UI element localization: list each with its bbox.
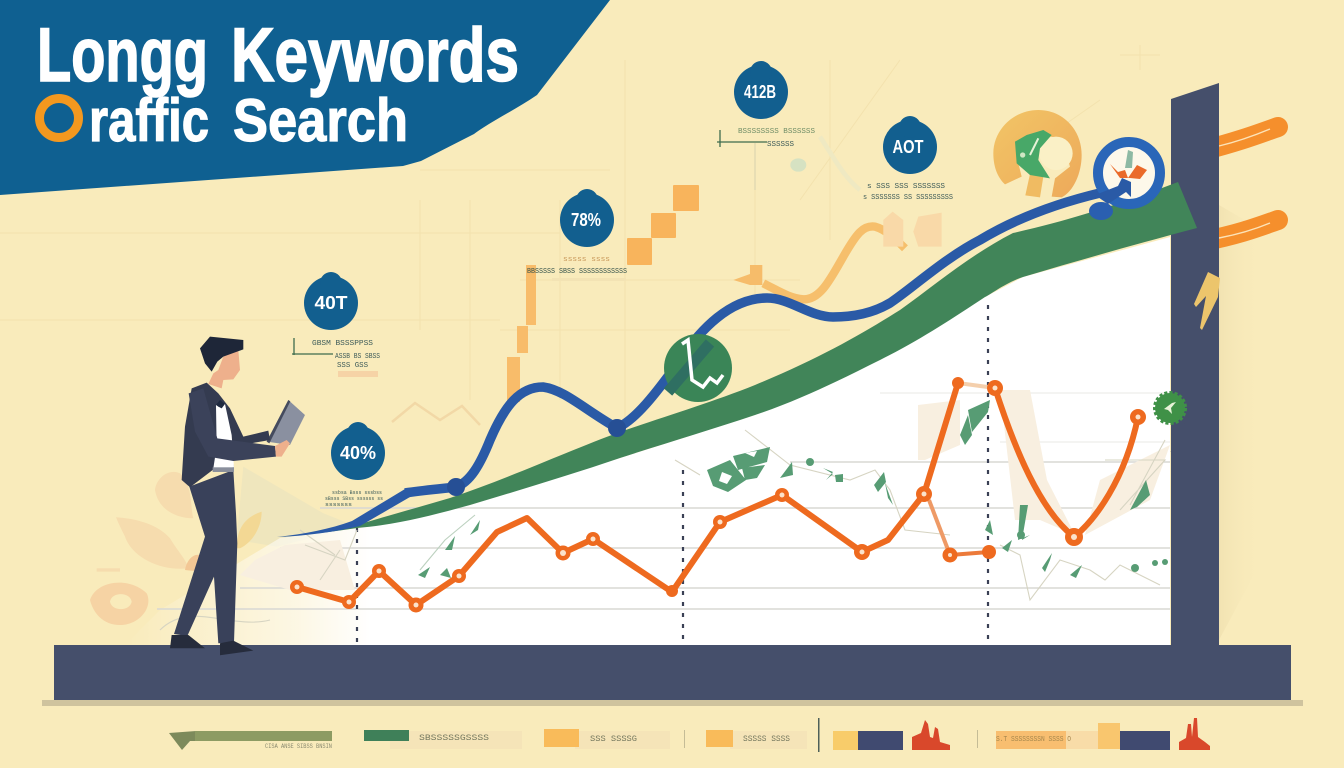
base platform xyxy=(42,645,1303,706)
dark column xyxy=(1171,83,1219,645)
stat bubble 78%: 78% xyxy=(571,210,601,230)
soft shadow beside column xyxy=(1219,205,1262,640)
callout 78%: sssss ssss xyxy=(563,256,610,264)
callout 40%: sBsss SBss ssssss ss xyxy=(325,495,383,502)
lightning icon xyxy=(1194,272,1220,330)
sleeve xyxy=(189,388,276,461)
callout 412B xyxy=(717,128,815,190)
dashed guide lines xyxy=(357,305,988,645)
stat bubble 40T xyxy=(304,272,358,330)
legend item 3: SSS SSSSG xyxy=(590,735,637,744)
stat bubble 412B: 412B xyxy=(744,82,776,102)
legend item 2 xyxy=(364,730,522,749)
title line 2 xyxy=(89,87,408,154)
stat bubble 78% xyxy=(560,189,614,247)
callout 78%: BBSSSSS SBSS SSSSSSSSSSSS xyxy=(527,268,627,276)
hand xyxy=(275,440,290,457)
callout 40T: ASSB BS SBSS xyxy=(335,353,380,361)
callout 40T: SSS GSS xyxy=(337,362,368,370)
callout 78% xyxy=(527,256,627,281)
callout 40T xyxy=(292,338,380,377)
callout 40% xyxy=(325,489,383,508)
person reading tablet xyxy=(170,337,305,655)
legend xyxy=(169,718,1210,752)
title banner xyxy=(0,0,610,195)
callout AOT: s SSSSSSS SS SSSSSSSSS xyxy=(863,194,953,202)
chart white area xyxy=(125,237,1170,645)
legend item 5 xyxy=(833,720,950,750)
title line 2: raffic xyxy=(89,87,209,154)
green chart badge xyxy=(664,334,732,402)
title line 1 xyxy=(37,13,519,98)
blue node: second xyxy=(608,419,626,437)
shirt xyxy=(213,404,234,468)
shoes xyxy=(170,635,253,655)
legend item 6: S.T SSSSSSSSN SSSS O xyxy=(996,736,1071,744)
faint background network chart xyxy=(160,390,1190,630)
callout AOT: s SSS SSS SSSSSSS xyxy=(867,183,945,191)
stat bubble 40%: 40% xyxy=(340,443,376,463)
tablet xyxy=(267,400,305,445)
legend item 6 xyxy=(996,718,1210,750)
callout AOT xyxy=(863,183,953,202)
magnifier icon xyxy=(1089,142,1160,220)
callout 412B: BSSSSSSSS BSSSSSS xyxy=(738,128,815,136)
stat bubble AOT: AOT xyxy=(892,137,924,157)
head xyxy=(200,337,243,388)
callout 40%: sssssss xyxy=(325,501,352,508)
green growth ribbon xyxy=(280,182,1197,537)
stat bubble AOT xyxy=(883,116,937,174)
legend item 4: SSSSS SSSS xyxy=(743,735,790,744)
stat bubble 40T: 40T xyxy=(314,293,348,313)
legend item 2: SBSSSSSGSSSS xyxy=(419,734,489,743)
legend item 1: CISA ANSE SIBSS BNSIN xyxy=(265,743,332,750)
blue traffic line xyxy=(277,184,1125,537)
title line 1: Longg xyxy=(37,13,208,98)
green gear icon xyxy=(1155,393,1190,452)
jacket xyxy=(182,383,270,487)
orange keyword line xyxy=(290,377,1146,612)
legend item 1 xyxy=(169,731,332,750)
callout 412B: SSSSSS xyxy=(767,141,794,149)
legend item 4 xyxy=(706,730,807,749)
light orange background trend xyxy=(733,137,942,299)
blue node: first xyxy=(447,478,465,496)
stat bubble 40% xyxy=(331,422,385,480)
orange secondary line xyxy=(929,383,995,555)
callout 40%: ssbsa Bsss sssbss xyxy=(332,489,382,496)
trousers xyxy=(174,470,237,643)
title line 2: Search xyxy=(233,87,408,154)
legend item 3 xyxy=(544,729,670,749)
title ring letter xyxy=(40,98,78,138)
grid lines xyxy=(157,393,1170,609)
orange tab top xyxy=(1205,127,1278,150)
stat bubble 412B xyxy=(734,61,788,119)
orange tab bottom xyxy=(1205,220,1278,241)
faint zigzag xyxy=(392,403,480,425)
faint decorative leaves xyxy=(90,467,357,625)
title line 1: Keywords xyxy=(231,13,519,98)
orange stepped squares xyxy=(507,185,699,402)
callout 40T: GBSM BSSSPPSS xyxy=(312,340,373,348)
gold circular icon xyxy=(993,110,1082,197)
